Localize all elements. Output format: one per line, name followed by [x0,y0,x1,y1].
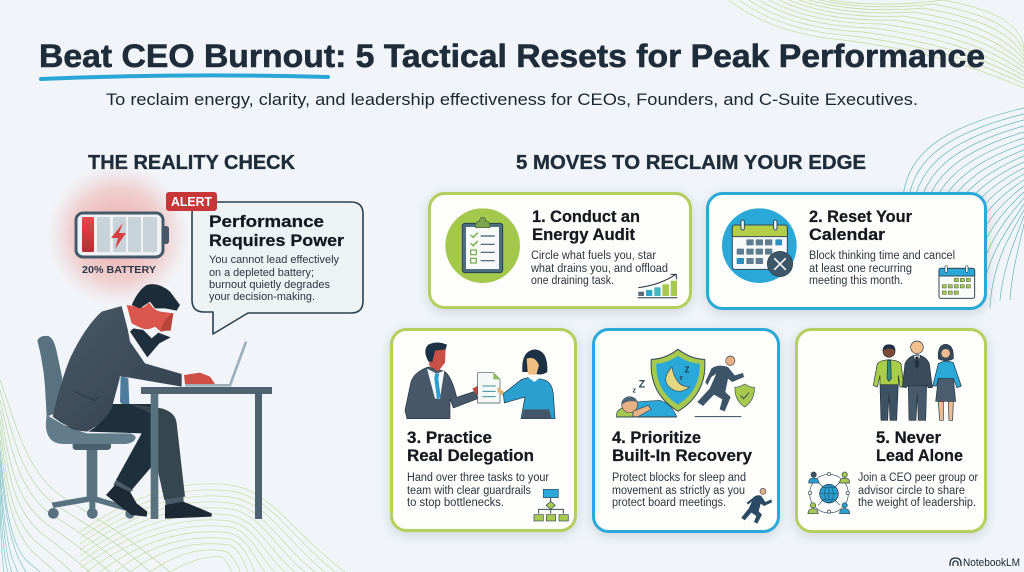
card 5 body: the weight of leadership. [858,497,976,509]
bubble heading: Requires Power [209,231,344,250]
card 2 body: Block thinking time and cancel [809,250,955,262]
bubble body [209,254,339,303]
icon: small runner [741,488,772,524]
card 5 body: Join a CEO peer group or [858,472,978,484]
battery with glow: 20% BATTERY [82,265,156,276]
card 2: reset calendar [708,194,986,308]
alert tag [166,192,217,211]
icon: peer network [808,472,850,514]
card 1: energy audit [430,194,690,308]
card 4 body: protect board meetings. [612,497,726,509]
title: Beat CEO Burnout: 5 Tactical Resets for Peak Performance [39,38,985,74]
right woman [933,344,961,420]
card 1 heading [532,207,640,244]
chair [37,336,136,519]
jacket pocket [75,392,98,401]
bubble body: your decision-making. [209,291,315,303]
bubble heading: Performance [209,212,324,231]
card 5 body [858,472,978,509]
sleeping figure: Z [639,378,646,390]
raised forearm [130,328,171,357]
document [478,373,500,403]
card 4 body: movement as strictly as you [612,485,745,497]
jacket [53,306,182,432]
icon: org flowchart [534,489,568,521]
woman [498,349,555,419]
card 4 body: Protect blocks for sleep and [612,472,746,484]
bubble body: on a depleted battery; [209,267,314,279]
card 1 heading: 1. Conduct an [532,207,640,226]
hand on forehead [161,313,173,331]
card 5 heading [876,428,963,465]
shield: Z [685,366,690,375]
heading: 5 moves: 5 MOVES TO RECLAIM YOUR EDGE [516,152,866,174]
tie [120,375,129,408]
card 4: recovery [594,330,778,532]
desk [141,387,272,519]
card 1 heading: Energy Audit [532,225,635,244]
card 4 heading: Built-In Recovery [612,446,753,465]
card 5 heading: 5. Never [876,428,941,447]
illustration: handing over a document [405,342,555,419]
card 3 body: Hand over three tasks to your [407,472,549,484]
heading: the reality check: THE REALITY CHECK [88,152,296,174]
card 3 heading: Real Delegation [407,446,534,465]
title underline [41,75,328,79]
card 2 heading: 2. Reset Your [809,207,912,226]
card 1 body: Circle what fuels you, star [531,250,656,262]
alert tag: ALERT [171,194,212,209]
card 3 heading [407,428,534,465]
shirt collar [122,305,133,332]
icon: growth chart [638,274,677,298]
card 4 heading: 4. Prioritize [612,428,701,447]
bubble body: You cannot lead effectively [209,254,339,266]
shoes [106,485,212,519]
runner [695,356,744,417]
card 2 body: meeting this month. [809,275,903,287]
man [405,342,482,419]
card 3: delegation [392,330,576,530]
centre man [902,341,932,420]
speech bubble [166,192,363,334]
card 2 body: at least one recurring [809,263,912,275]
left man [873,345,904,420]
sleeping figure: z [632,386,636,395]
card 5 body: advisor circle to share [858,485,965,497]
icon: calendar [722,208,797,283]
hand on keyboard [184,373,215,384]
icon: small calendar [939,266,975,298]
far leg trousers [63,404,152,490]
burned-out executive at desk [37,284,272,519]
card 3 body [407,472,549,509]
icon: clipboard [445,208,520,283]
small shield [735,384,754,407]
card 1 body: what drains you, and offload [530,263,668,275]
card 3 heading: 3. Practice [407,428,492,447]
card 5: never lead alone [796,330,986,532]
shield [651,349,705,411]
hair [132,284,180,311]
shield: z [679,374,683,381]
card 4 body [612,472,746,509]
watermark: NotebookLM: NotebookLM [963,557,1020,569]
laptop [185,342,246,385]
card 1 body [530,250,668,287]
card 5 heading: Lead Alone [876,446,963,465]
near leg trousers [130,404,185,500]
card 2 body [809,250,955,287]
face [127,303,173,332]
sleeping figure [616,378,677,417]
card 2 heading [809,207,912,244]
card 3 body: team with clear guardrails [407,485,531,497]
card 2 heading: Calendar [809,225,885,244]
illustration: sleep, shield, running [616,349,754,417]
card 4 heading [612,428,753,465]
subtitle: To reclaim energy, clarity, and leadership effectiveness for CEOs, Founders, and C-Suite Executives. [106,91,918,109]
bubble heading [209,212,344,250]
battery with glow [46,163,190,307]
card 1 body: one draining task. [531,275,614,287]
bubble body: burnout quietly degrades [209,279,330,291]
illustration: three leaders [873,341,961,420]
socks [113,480,184,507]
card 3 body: to stop bottlenecks. [407,497,504,509]
